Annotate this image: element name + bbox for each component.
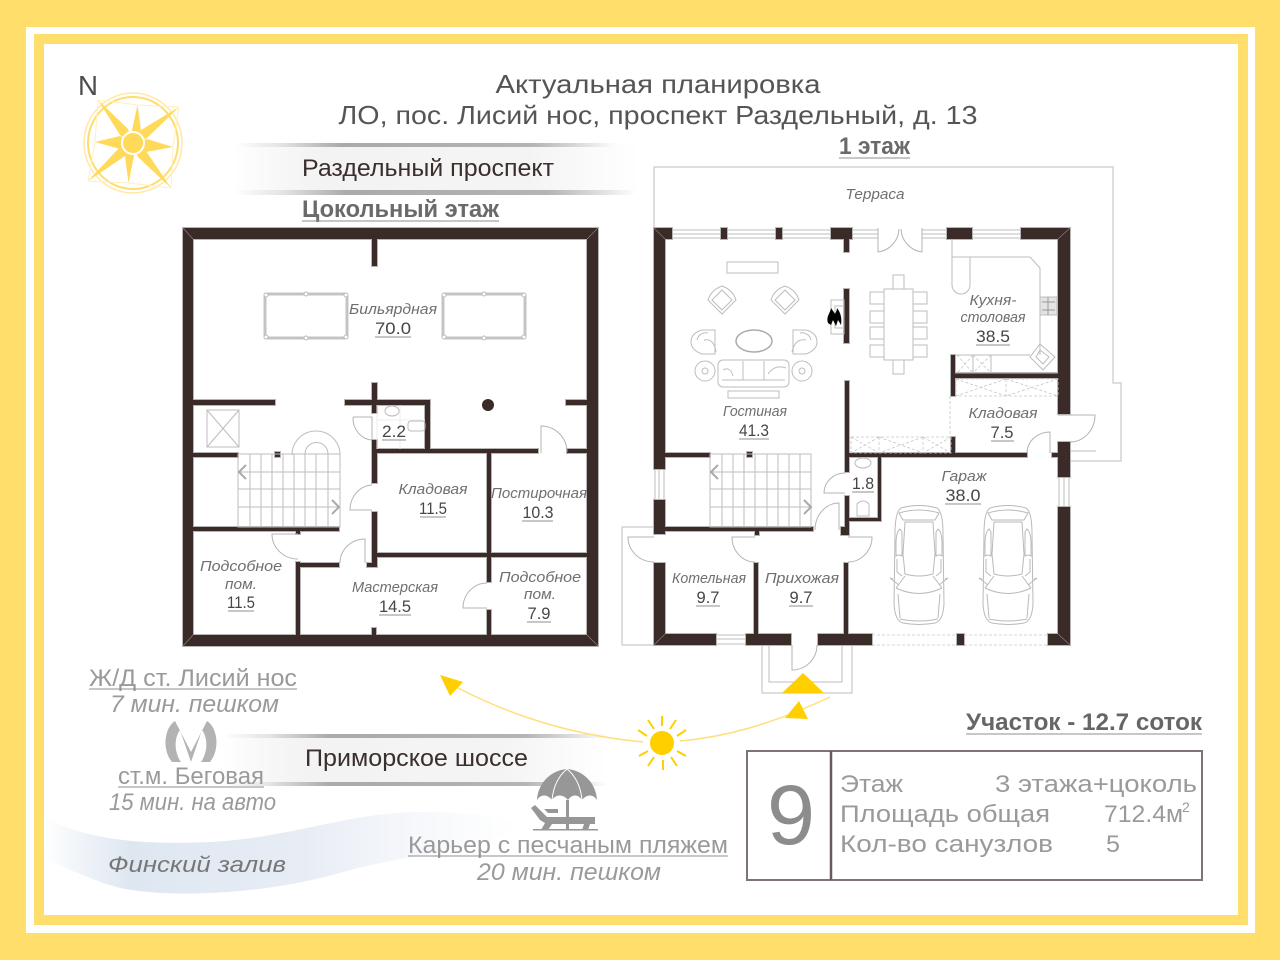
- text: railway station: [89, 665, 297, 718]
- text: metro station: ст.м. Беговая: [118, 763, 264, 790]
- label: Постирочная: 10.3: [522, 503, 554, 522]
- label: Подсобное пом. 7.9: [499, 569, 581, 623]
- label: Подсобное пом. 11.5: [200, 558, 282, 612]
- text: quarry beach: Карьер с песчаным пляжем: [408, 832, 728, 859]
- label: Гостиная: Гостиная: [723, 403, 787, 420]
- text: metro station: 15 мин. на авто: [109, 789, 276, 816]
- heading: basement floor: Цокольный этаж: [302, 196, 500, 223]
- sea band: Финский залив: Финский залив: [108, 852, 286, 877]
- arrow: sun path left: [440, 675, 643, 742]
- garage door dashes: [872, 635, 1048, 645]
- doors: [628, 228, 1095, 670]
- label: Мастерская: Мастерская: [352, 579, 438, 596]
- living room furniture: [691, 262, 817, 398]
- label: Подсобное пом. 11.5: пом.: [225, 576, 257, 593]
- row: floors: Этаж: [840, 771, 903, 798]
- label: Кладовая: [398, 481, 468, 518]
- road: Приморское шоссе: [223, 734, 608, 786]
- title: Актуальная планировка: [496, 69, 821, 99]
- icon: car 1: [890, 506, 948, 624]
- label: Гостиная: 41.3: [739, 421, 769, 440]
- floor number: 9: [767, 768, 815, 862]
- label: Кухня-столовая: столовая: [960, 309, 1026, 326]
- arrow: entrance marker: [782, 673, 824, 693]
- label: Подсобное пом. 7.9: Подсобное: [499, 569, 581, 586]
- kitchen counter: [952, 239, 1058, 373]
- label: Кухня-столовая: 38.5: [976, 327, 1010, 346]
- label: Кладовая: 7.5: [990, 423, 1014, 442]
- label: Прихожая: Прихожая: [765, 570, 839, 587]
- label: Подсобное пом. 11.5: Подсобное: [200, 558, 282, 575]
- label: Котельная: [672, 570, 746, 607]
- walls: [654, 228, 1070, 645]
- label: Котельная: 9.7: [696, 588, 720, 607]
- label: Котельная: Котельная: [672, 570, 746, 587]
- windows: [655, 230, 1069, 644]
- icon: beach umbrella and lounger: [531, 769, 598, 830]
- label: Постирочная: Постирочная: [491, 485, 587, 502]
- icon: sun: [638, 716, 686, 770]
- text: quarry beach: 20 мин. пешком: [476, 859, 661, 886]
- row: total area: 712.4м: [1104, 801, 1183, 828]
- road: Раздельный проспект: [235, 143, 640, 195]
- row: total area: Площадь общая: [840, 801, 1050, 828]
- road: Раздельный проспект: Раздельный проспект: [302, 155, 554, 182]
- terrace outlines: [622, 167, 1121, 693]
- label: Кладовая: [968, 405, 1038, 442]
- fireplace: [827, 300, 844, 334]
- row: bathrooms: [840, 831, 1120, 858]
- text: quarry beach: [408, 832, 728, 886]
- label: Терраса: Терраса: [846, 186, 904, 203]
- bathroom fixtures: [377, 405, 425, 449]
- title: [338, 69, 978, 130]
- panel: summary table: [747, 751, 1202, 880]
- label: Гостиная: [723, 403, 787, 440]
- label: Бильярдная: Бильярдная: [349, 301, 437, 318]
- heading: plot size: Участок - 12.7 соток: [966, 709, 1203, 736]
- label: Прихожая: 9.7: [790, 588, 812, 607]
- label: Бильярдная: [349, 301, 437, 338]
- label: 2.2: 2.2: [382, 422, 406, 441]
- title: ЛО, пос. Лисий нос, проспект Раздельный, д. 13: [338, 100, 978, 130]
- icon: compass rose: [78, 70, 182, 193]
- billiard tables: [264, 292, 526, 340]
- row: bathrooms: 5: [1106, 831, 1120, 858]
- row: total area: 2: [1182, 799, 1190, 815]
- text: railway station: Ж/Д ст. Лисий нос: [89, 665, 297, 692]
- label: Кладовая: Кладовая: [968, 405, 1038, 422]
- shaft: [207, 410, 239, 447]
- label: Подсобное пом. 11.5: 11.5: [227, 593, 255, 612]
- row: floors: [840, 771, 1197, 798]
- cabinets: [851, 355, 1058, 453]
- text: metro station: [109, 763, 276, 816]
- sea band: Финский залив: [44, 812, 520, 894]
- label: Гараж: 38.0: [946, 486, 980, 505]
- road: Приморское шоссе: Приморское шоссе: [305, 745, 528, 772]
- arrow: sun path right: [680, 697, 830, 741]
- label: Постирочная: [491, 485, 587, 522]
- text: railway station: 7 мин. пешком: [110, 691, 279, 718]
- label: Прихожая: [765, 570, 839, 607]
- walls: [183, 228, 598, 646]
- row: floors: 3 этажа+цоколь: [995, 771, 1197, 798]
- label: Мастерская: [352, 579, 438, 616]
- label: Гараж: [942, 468, 987, 505]
- panel: first floor plan: [622, 167, 1121, 693]
- bathroom fixtures: [855, 458, 871, 516]
- label: Подсобное пом. 7.9: пом.: [524, 586, 556, 603]
- row: total area: [840, 799, 1190, 828]
- column: [482, 399, 494, 411]
- doors: [272, 417, 567, 608]
- label: Мастерская: 14.5: [379, 597, 411, 616]
- label: Бильярдная: 70.0: [375, 319, 411, 338]
- label: Кухня-столовая: [960, 292, 1026, 346]
- label: Подсобное пом. 7.9: 7.9: [528, 604, 550, 623]
- staircase: [710, 454, 811, 527]
- label: Кладовая: Кладовая: [398, 481, 468, 498]
- label: Кладовая: 11.5: [419, 499, 447, 518]
- label: 1.8: 1.8: [852, 474, 874, 493]
- heading: first floor: 1 этаж: [839, 133, 911, 160]
- icon: metro logo: [166, 721, 216, 762]
- staircase: [238, 431, 340, 527]
- label: Гараж: Гараж: [942, 468, 987, 485]
- label: Кухня-столовая: Кухня-: [970, 292, 1017, 309]
- row: bathrooms: Кол-во санузлов: [840, 831, 1053, 858]
- icon: compass rose: N: [78, 70, 98, 101]
- panel: basement floor plan: [183, 228, 598, 646]
- dining table: [870, 275, 927, 374]
- icon: car 2: [979, 506, 1037, 624]
